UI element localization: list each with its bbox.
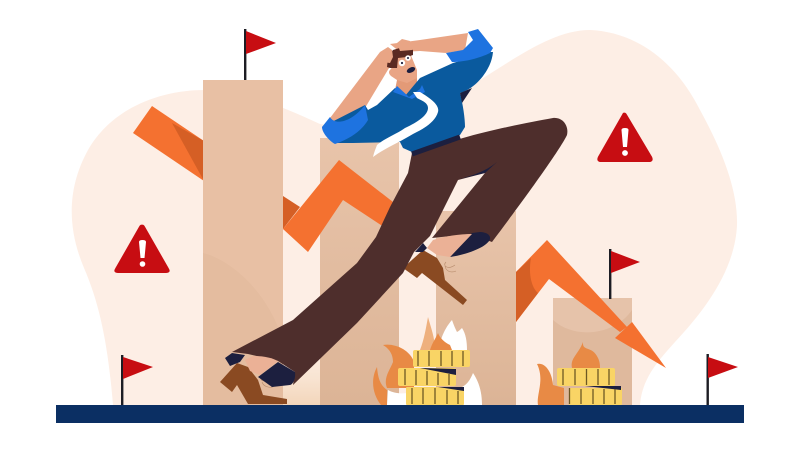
eyes <box>399 55 411 66</box>
belt <box>412 137 460 154</box>
collar <box>393 85 425 99</box>
left cuff <box>322 105 368 144</box>
tie <box>373 92 438 157</box>
speckled dust patch <box>283 345 320 405</box>
bar 1 <box>203 80 283 405</box>
flag: on bar 1 <box>244 29 276 80</box>
flames and coins: centre <box>373 317 482 405</box>
background blob <box>72 30 737 405</box>
bar 3 <box>436 211 516 405</box>
hair <box>387 47 413 68</box>
warning icon: right <box>598 114 652 161</box>
flames and coins: right <box>537 342 622 405</box>
bar 4 <box>553 298 632 405</box>
left forearm <box>330 52 393 127</box>
right forearm <box>390 33 468 53</box>
right cuff <box>446 29 493 62</box>
back cuff <box>225 353 295 387</box>
back shoe <box>220 363 287 404</box>
arrow: final descent with head <box>516 240 666 368</box>
hands <box>380 39 412 63</box>
neck <box>395 78 417 96</box>
head <box>389 53 417 83</box>
back ankle skin <box>245 356 278 375</box>
flag: ground left <box>121 355 153 405</box>
shadow under thigh <box>460 162 497 179</box>
bar 2 <box>320 138 399 405</box>
front ankle skin <box>427 234 472 257</box>
man <box>220 29 567 404</box>
flag: ground right <box>706 354 738 405</box>
arrow segment: peak in front of bar 2 <box>283 160 393 252</box>
front cuff <box>415 232 490 257</box>
mouth <box>406 66 416 74</box>
ground bar <box>56 405 744 423</box>
warning icon: left <box>115 226 169 272</box>
arrow segment: first descent behind bars <box>133 106 300 229</box>
front shoe <box>403 250 467 305</box>
shirt <box>322 52 493 152</box>
underarm shadow <box>460 88 472 103</box>
pants <box>232 118 567 385</box>
flag: on bar 4 <box>609 249 640 299</box>
